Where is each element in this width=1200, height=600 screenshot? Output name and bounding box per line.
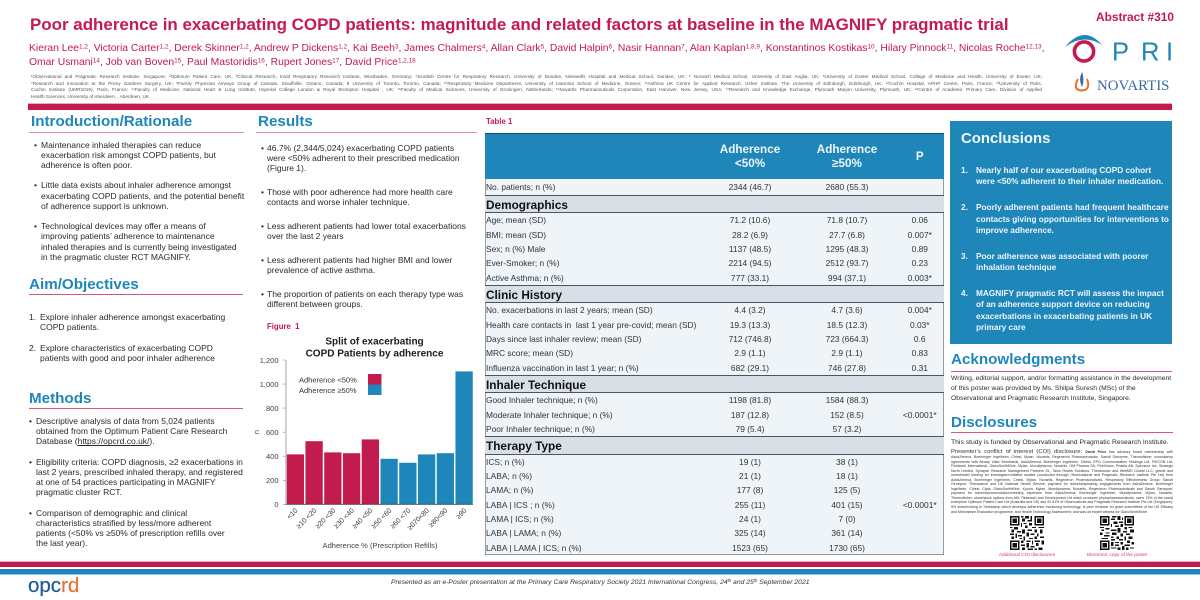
y axis labels: 800 xyxy=(266,404,278,413)
footer text: Presented as an e-Poster presentation at the Primary Care Respiratory Society 2021 International Congress, 24th and 25th September 2021 xyxy=(391,578,810,586)
y axis labels xyxy=(260,356,278,509)
table: baseline characteristics: 1523 (65) xyxy=(732,543,768,553)
table: baseline characteristics: <0.0001* xyxy=(903,500,937,510)
bullet list: methods: Descriptive analysis of data from 5,024 patients xyxy=(36,416,215,426)
y axis labels: 400 xyxy=(266,452,278,461)
panel: methods xyxy=(29,390,243,548)
table: baseline characteristics: 712 (746.8) xyxy=(729,334,771,344)
table: baseline characteristics: Good Inhaler technique; n (%) xyxy=(486,395,598,405)
section: demographics xyxy=(484,195,944,213)
section: inhaler technique: Inhaler Technique xyxy=(486,378,586,392)
conclusion 2: contacts giving opportunities for interventions to xyxy=(976,215,1169,224)
table: baseline characteristics: 255 (11) xyxy=(735,500,765,510)
numbered list: objectives: 1. xyxy=(29,312,36,322)
table: baseline characteristics: 0.007* xyxy=(908,230,932,240)
table: baseline characteristics: 0.004* xyxy=(908,305,932,315)
table: baseline characteristics: 1198 (81.8) xyxy=(729,395,771,405)
bullet list: introduction: Technological devices may offer a means of xyxy=(41,221,206,231)
section: demographics: Demographics xyxy=(486,198,568,212)
bullet list: results: Those with poor adherence had more health care xyxy=(267,187,453,197)
table: baseline characteristics: Moderate Inhaler technique; n (%) xyxy=(486,410,613,420)
table: baseline characteristics xyxy=(484,133,944,555)
x axis title: Adherence % (Prescription Refills) xyxy=(323,541,438,550)
table: baseline characteristics: 4.7 (3.6) xyxy=(831,305,863,315)
affiliations: ¹Observational and Pragmatic Research Institute, Singapore; ²Optimum Patient Care, UK; ³Clinical Research, Insaf Respiratory Research Institute, Wiesbaden, Germany; ⁴Scottish Centre for Respiratory Research, University of Dundee, Ninewells Hospital and Medical School, Dundee, UK; ⁵ Norwich Medical School, University of East Anglia, UK; ⁶University of Exeter Medical School, College of Medicine and Health, University of Exeter, UK; xyxy=(31,74,1042,78)
bullet list: introduction: Little data exists about inhaler adherence amongst xyxy=(41,180,231,190)
table: baseline characteristics: 18 (1) xyxy=(836,471,858,481)
x axis labels: ≥80<90 xyxy=(428,507,449,529)
table: baseline characteristics: 2344 (46.7) xyxy=(729,182,771,192)
table: baseline characteristics: 125 (5) xyxy=(834,485,860,495)
table: baseline characteristics: LAMA | ICS; n (%) xyxy=(486,514,554,524)
affiliations: Cochin Institute (UMR1016), Paris, France; ¹⁴Faculty of Medicine, National Heart & Lung Institute, Imperial College London & Royal Brompton Hospital , UK; ¹⁵Faculty of Medical Sciences, University of Groningen, Netherlands; ¹⁶Novartis Pharmaceuticals Corporation, East Hanover, New Jersey, USA; ¹⁷Research and Knowledge Exchange, Plymouth Marjon University, Plymouth, UK; ¹⁸Centre of Academic Primary Care, Division of Applied xyxy=(31,87,1042,92)
conclusion 2 xyxy=(961,203,1169,235)
bullet list: results: The proportion of patients on each therapy type was xyxy=(267,289,463,299)
panel: aim and objectives xyxy=(29,276,243,363)
conclusion 3: Poor adherence was associated with poorer xyxy=(976,252,1148,260)
bullet list: methods: obtained from the Optimum Patient Care Research xyxy=(36,426,227,436)
QR code: additional COI disclosures xyxy=(1010,516,1044,550)
bullet list: introduction: improving patients’ adherence to maintenance xyxy=(41,231,215,241)
section: clinic history xyxy=(484,285,944,303)
x axis labels xyxy=(286,507,468,532)
heading: introduction: Introduction/Rationale xyxy=(31,113,192,130)
x axis labels: ≥10 <20 xyxy=(295,507,318,530)
conclusion 4: exacerbations in exacerbating patients in UK xyxy=(976,312,1152,321)
figure label: Figure 1 xyxy=(267,322,300,331)
bullet list: methods: the last year). xyxy=(36,538,88,548)
table: baseline characteristics: 19 (1) xyxy=(739,457,761,467)
conclusion 3: 3. xyxy=(961,252,968,260)
numbered list: objectives: COPD patients. xyxy=(40,322,99,332)
panel: results: • xyxy=(261,289,264,299)
conclusion 4: of an adherence support device on reducing xyxy=(976,300,1150,309)
table: baseline characteristics: LABA | ICS ; n (%) xyxy=(486,500,555,510)
funding statement: This study is funded by Observational and Pragmatic Research Institute. xyxy=(951,439,1169,446)
table: baseline characteristics: 28.2 (6.9) xyxy=(732,230,768,240)
table: baseline characteristics: 1584 (88.3) xyxy=(826,395,868,405)
bullet list: results: over the last 2 years xyxy=(267,231,344,241)
table: baseline characteristics: LABA | LAMA | ICS; n (%) xyxy=(486,543,582,553)
table: baseline characteristics: 2.9 (1.1) xyxy=(831,348,863,358)
x axis labels: ≥070<80 xyxy=(407,507,431,532)
table: baseline characteristics: LAMA; n (%) xyxy=(486,485,533,495)
logo: Novartis xyxy=(1074,72,1169,92)
bullet list: methods: Comparison of demographic and clinical xyxy=(36,508,187,518)
disclosure text: Presenter’s conflict of interest (COI) disclosure: David Price has advisory board membership with AstraZeneca, Boehringer Ingelheim, Chiesi, Mylan, Novartis, Regeneron Pharmaceuticals, Sanofi Genzyme, Thermofisher; consultancy agreements with Airway Vista Secretariat, AstraZeneca, Boehringer Ingelheim, Chiesi, EPG Communication Holdings Ltd, FIECON Ltd, Fieldwork International, GlaxoSmithKline, Mylan, Mundipharma, Novartis, OM Pharma SA, PeerVoice, Phadia AB, Spirosure Inc, Strategic North Limited, Synapse Research Management Partners SL, Talos Health Solutions, Theravance and WebMD Global LLC; grants and unrestricted funding for investigator-initiated studies (conducted through Observational and Pragmatic Research Institute Pte Ltd) from AstraZeneca, Boehringer Ingelheim, Chiesi, Mylan, Novartis, Regeneron Pharmaceuticals, Respiratory Effectiveness Group, Sanofi Genzyme, Theravance and UK National Health Service; payment for lectures/speaking engagements from AstraZeneca, Boehringer Ingelheim, Chiesi, Cipla, GlaxoSmithKline, Kyorin, Mylan, Mundipharma, Novartis, Regeneron Pharmaceuticals and Sanofi Genzyme; payment for travel/accommodation/meeting expenses from AstraZeneca, Boehringer Ingelheim, Mundipharma, Mylan, Novartis, Thermofisher; stock/stock options from AKL Research and Development Ltd which produces phytopharmaceuticals; owns 74% of the social enterprise Optimum Patient Care Ltd (Australia and UK) and 92.61% of Observational and Pragmatic Research Institute Pte Ltd (Singapore); 5% shareholding in Timestamp which develops adherence monitoring technology; is peer reviewer for grant committees of the UK Efficacy and Mechanism Evaluation programme, and Health Technology Assessment; and was an expert witness for GlaxoSmithKline. xyxy=(951,449,1173,514)
bullet list: introduction: exacerbating COPD patients, and the potential benefit xyxy=(41,191,244,201)
bullet list: results: were <50% adherent to their prescribed medication xyxy=(267,153,460,163)
table header xyxy=(484,133,944,179)
table: baseline characteristics: 1137 (48.5) xyxy=(729,244,771,254)
table: baseline characteristics: LABA; n (%) xyxy=(486,471,532,481)
affiliations xyxy=(31,74,1042,99)
bullet list: methods: patients (<50% vs ≥50% of prescription refills over xyxy=(36,528,225,538)
panel: acknowledgments xyxy=(951,351,1172,402)
acknowledgments text: Observational and Pragmatic Research Institute, Singapore. xyxy=(951,395,1131,402)
footer stripe: red xyxy=(0,561,1200,567)
bullet list: results: (Figure 1). xyxy=(267,163,306,173)
x axis labels: ≥30 <40 xyxy=(333,507,356,530)
bullet list: introduction: exacerbation risk amongst COPD patients, but xyxy=(41,150,216,160)
numbered list: objectives: Explore inhaler adherence amongst exacerbating xyxy=(40,312,225,322)
table: baseline characteristics: 187 (12.8) xyxy=(731,410,769,420)
bullet list: introduction: Maintenance inhaled therapies can reduce xyxy=(41,140,201,150)
bullet list: methods: at one of 54 practices participating in MAGNIFY xyxy=(36,477,216,487)
table: baseline characteristics: BMI; mean (SD) xyxy=(486,230,546,240)
bullet list: results: different between groups. xyxy=(267,299,363,309)
x axis labels: ≥40 <50 xyxy=(351,507,374,530)
section: therapy type: Therapy Type xyxy=(486,439,562,453)
conclusion 2: improve adherence. xyxy=(976,226,1054,235)
table: baseline characteristics: 24 (1) xyxy=(739,514,761,524)
conclusion 1: were <50% adherent to their inhaler medication. xyxy=(976,177,1163,186)
table: baseline characteristics: 27.7 (6.8) xyxy=(829,230,865,240)
panel: results: • xyxy=(261,221,264,231)
conclusion 3 xyxy=(961,252,1148,272)
table: baseline characteristics: MRC score; mean (SD) xyxy=(486,348,573,358)
table: baseline characteristics: 19.3 (13.3) xyxy=(730,320,770,330)
numbered list: objectives: patients with good and poor inhaler adherence xyxy=(40,353,215,363)
bullet list: introduction: inhaled therapies and is currently being investigated xyxy=(41,242,237,252)
table: baseline characteristics: 1295 (48.3) xyxy=(826,244,868,254)
table: baseline characteristics: Active Asthma; n (%) xyxy=(486,273,564,283)
acknowledgments text: of this poster was provided by Ms. Shilpa Suresh (MSc) of the xyxy=(951,385,1136,392)
panel: methods: • xyxy=(29,416,32,426)
panel: methods: • xyxy=(29,457,32,467)
chart title: Split of exacerbating xyxy=(325,336,424,348)
table: baseline characteristics: 1730 (65) xyxy=(829,543,865,553)
table: baseline characteristics: <0.0001* xyxy=(903,410,937,420)
chart title: COPD Patients by adherence xyxy=(306,348,444,360)
table: baseline characteristics: 401 (15) xyxy=(831,500,863,510)
panel: introduction: • xyxy=(34,180,37,190)
conclusion 2: 2. xyxy=(961,203,968,212)
table: baseline characteristics: 994 (37.1) xyxy=(828,273,866,283)
x axis labels: ≥60 <70 xyxy=(389,507,412,530)
table: baseline characteristics: LABA | LAMA; n (%) xyxy=(486,528,561,538)
panel: methods: • xyxy=(29,508,32,518)
table: baseline characteristics: Health care contacts in last 1 year pre-covid; mean (SD) xyxy=(486,320,696,330)
bullet list: introduction: adherence is often poor. xyxy=(41,160,132,170)
table header: P xyxy=(916,150,924,163)
bullet list: results xyxy=(261,143,466,309)
table: baseline characteristics: 0.89 xyxy=(912,244,928,254)
heading: disclosures: Disclosures xyxy=(951,414,1037,431)
bullet list: results: contacts and worse inhaler technique. xyxy=(267,197,410,207)
abstract number: Abstract #310 xyxy=(1096,10,1174,24)
acknowledgments text xyxy=(951,375,1172,402)
section: therapy type xyxy=(484,436,944,455)
table: baseline characteristics: 0.003* xyxy=(908,273,932,283)
authors: Kieran Lee1,2, Victoria Carter1,2, Derek Skinner1,2, Andrew P Dickens1,2, Kai Beeh3, James Chalmers4, Allan Clark5, David Halpin6, Nasir Hannan7, Alan Kaplan1,8,9, Konstantinos Kostikas10, Hilary Pinnock11, Nicolas Roche12,13, xyxy=(29,43,1044,54)
conclusion 2: Poorly adherent patients had frequent healthcare xyxy=(976,203,1169,212)
numbered list: objectives: 2. xyxy=(29,343,36,353)
table: baseline characteristics: 361 (14) xyxy=(831,528,863,538)
table: baseline characteristics: 57 (3.2) xyxy=(833,424,861,434)
QR code: electronic copy of the poster xyxy=(1100,516,1134,550)
table: baseline characteristics: 71.8 (10.7) xyxy=(827,215,867,225)
table: baseline characteristics: 0.23 xyxy=(912,258,928,268)
table: baseline characteristics: Poor Inhaler technique; n (%) xyxy=(486,424,595,434)
bar chart: split of exacerbating COPD patients by adherence: n xyxy=(252,430,261,434)
table: baseline characteristics: 777 (33.1) xyxy=(731,273,769,283)
heading: acknowledgments: Acknowledgments xyxy=(951,351,1085,368)
table: baseline characteristics: 7 (0) xyxy=(838,514,856,524)
y axis labels: 600 xyxy=(266,428,278,437)
panel: introduction: • xyxy=(34,221,37,231)
table: baseline characteristics: 0.6 xyxy=(914,334,926,344)
bullet list: results: Less adherent patients had higher BMI and lower xyxy=(267,255,452,265)
authors xyxy=(29,43,1044,68)
table: baseline characteristics: 18.5 (12.3) xyxy=(827,320,867,330)
y axis labels: 1,200 xyxy=(260,356,278,365)
bullet list: results: prevalence of active asthma. xyxy=(267,265,375,275)
table: baseline characteristics: 79 (5.4) xyxy=(736,424,764,434)
logo: OPRI xyxy=(1065,35,1173,64)
table header: ≥50% xyxy=(832,157,862,170)
table: baseline characteristics: No. exacerbations in last 2 years; mean (SD) xyxy=(486,305,653,315)
table: baseline characteristics: 4.4 (3.2) xyxy=(734,305,766,315)
table: baseline characteristics: Age; mean (SD) xyxy=(486,215,546,225)
heading: methods: Methods xyxy=(29,390,91,406)
numbered list: objectives xyxy=(29,312,225,363)
conclusion 1: 1. xyxy=(961,166,968,174)
table: baseline characteristics: 71.2 (10.6) xyxy=(730,215,770,225)
table: baseline characteristics: 0.03* xyxy=(910,320,930,330)
bar chart: split of exacerbating COPD patients by adherence xyxy=(252,336,473,550)
table header: <50% xyxy=(735,157,765,170)
chart title xyxy=(306,336,444,360)
table: baseline characteristics: 682 (29.1) xyxy=(731,363,769,373)
section: inhaler technique xyxy=(484,375,944,393)
bullet list: methods: pragmatic cluster RCT. xyxy=(36,487,122,497)
panel: results: • xyxy=(261,255,264,265)
bullet list: results: Less adherent patients had lower total exacerbations xyxy=(267,221,466,231)
table label: Table 1 xyxy=(486,117,512,126)
table: baseline characteristics: 152 (8.5) xyxy=(830,410,864,420)
legend xyxy=(299,374,382,395)
y axis labels: 0 xyxy=(274,500,278,509)
bullet list: introduction: in the pragmatic cluster RCT MAGNIFY. xyxy=(41,252,191,262)
conclusion 3: inhalation technique xyxy=(976,263,1056,272)
heading: conclusions: Conclusions xyxy=(961,131,1050,147)
panel: introduction xyxy=(29,113,244,262)
acknowledgments text: Writing, editorial support, and/or formatting assistance in the development xyxy=(951,375,1171,382)
legend: Adherence ≥50% xyxy=(299,386,357,395)
table: baseline characteristics: 177 (8) xyxy=(737,485,763,495)
table: baseline characteristics: 21 (1) xyxy=(739,471,761,481)
table: baseline characteristics: Days since last inhaler review; mean (SD) xyxy=(486,334,641,344)
panel: introduction: • xyxy=(34,140,37,150)
x axis labels: ≥50 <60 xyxy=(370,507,393,530)
table: baseline characteristics: 746 (27.8) xyxy=(828,363,866,373)
conclusion 4: MAGNIFY pragmatic RCT will assess the impact xyxy=(976,288,1164,298)
panel: disclosures xyxy=(951,414,1173,514)
table: baseline characteristics: 2512 (93.7) xyxy=(826,258,868,268)
table: baseline characteristics: 723 (664.3) xyxy=(826,334,868,344)
table: baseline characteristics: 0.31 xyxy=(912,363,928,373)
heading: aim: Aim/Objectives xyxy=(29,276,139,293)
top rule xyxy=(28,103,1172,110)
y axis labels: 1,000 xyxy=(260,380,278,389)
affiliations: ⁷Research and Innovation at the Priory Gardens Surgery, UK; ⁸Family Physician Airways Group of Canada, Stouffville, Ontario, Canada; 9 University of Toronto, Toronto, Canada; ¹⁰Respiratory Medicine Department, University of Ioannina School of Medicine, Greece; ¹¹Asthma UK Centre for Applied Research, Usher Institute, The University of Edinburgh, Edinburgh, UK; ¹²Cochin Hospital, APHP Centre, Paris, France; ¹³University of Paris, xyxy=(31,80,1042,86)
table: baseline characteristics: Ever-Smoker; n (%) xyxy=(486,258,560,268)
authors: Omar Usmani14, Job van Boven15, Paul Mastoridis16, Rupert Jones17, David Price1,2,18 xyxy=(29,57,416,68)
conclusion 1: Nearly half of our exacerbating COPD cohort xyxy=(976,166,1151,174)
logo: opcrd: opcrd xyxy=(28,574,79,597)
affiliations: Health Sciences, University of Aberdeen, , Aberdeen, UK xyxy=(31,94,149,99)
panel: results: • xyxy=(261,187,264,197)
table: baseline characteristics: 0.06 xyxy=(912,215,928,225)
footer stripe: blue xyxy=(0,569,1200,575)
table: baseline characteristics: 0.83 xyxy=(912,348,928,358)
y axis labels: 200 xyxy=(266,476,278,485)
x axis labels: ≥90 xyxy=(455,507,468,521)
table: baseline characteristics: ICS; n (%) xyxy=(486,457,525,467)
x axis labels: ≥20 <30 xyxy=(314,507,337,530)
title: Poor adherence in exacerbating COPD patients: magnitude and related factors at baseline in the MAGNIFY pragmatic trial xyxy=(30,15,1009,34)
bullet list: methods: Eligibility criteria: COPD diagnosis, ≥2 exacerbations in xyxy=(36,457,243,467)
conclusion 4: 4. xyxy=(961,288,968,298)
conclusion 4 xyxy=(961,288,1164,332)
table header: Adherence xyxy=(720,143,780,156)
bullet list: results: 46.7% (2,344/5,024) exacerbating COPD patients xyxy=(267,143,454,153)
table: baseline characteristics: 2.9 (1.1) xyxy=(734,348,766,358)
panel: conclusions xyxy=(950,121,1172,344)
bullet list: methods: characteristics stratified by less/more adherent xyxy=(36,518,211,528)
table: baseline characteristics: 2214 (94.5) xyxy=(729,258,771,268)
legend: Adherence <50% xyxy=(299,376,357,384)
table: baseline characteristics: Influenza vaccination in last 1 year; n (%) xyxy=(486,363,639,373)
table: baseline characteristics: No. patients; n (%) xyxy=(486,182,555,192)
conclusion 1 xyxy=(961,166,1163,186)
table: baseline characteristics: 2680 (55.3) xyxy=(826,182,868,192)
bullet list: methods: last 2 years, prescribed inhaled therapy, and registered xyxy=(36,467,243,477)
numbered list: objectives: Explore characteristics of exacerbating COPD xyxy=(40,343,213,353)
panel: results: • xyxy=(261,143,264,153)
panel: results xyxy=(256,112,477,331)
bullet list: introduction xyxy=(34,140,244,262)
conclusion 4: primary care xyxy=(976,323,1026,332)
section: clinic history: Clinic History xyxy=(486,288,562,302)
x axis labels: <10 xyxy=(286,507,299,521)
table: baseline characteristics: 38 (1) xyxy=(836,457,858,467)
bullet list: methods xyxy=(29,416,243,548)
QR caption: electronic copy: Electronic copy of the poster xyxy=(1087,553,1148,558)
bullet list: methods: Database (https://opcrd.co.uk/). xyxy=(36,436,155,446)
QR caption: additional COI disclosures: Additional COI disclosures xyxy=(999,553,1055,558)
bullet list: introduction: of adherence support is unknown. xyxy=(41,201,169,211)
table: baseline characteristics: 325 (14) xyxy=(734,528,766,538)
heading: results: Results xyxy=(258,112,313,130)
table: baseline characteristics: Sex; n (%) Male xyxy=(486,244,546,254)
table header: Adherence xyxy=(817,143,877,156)
